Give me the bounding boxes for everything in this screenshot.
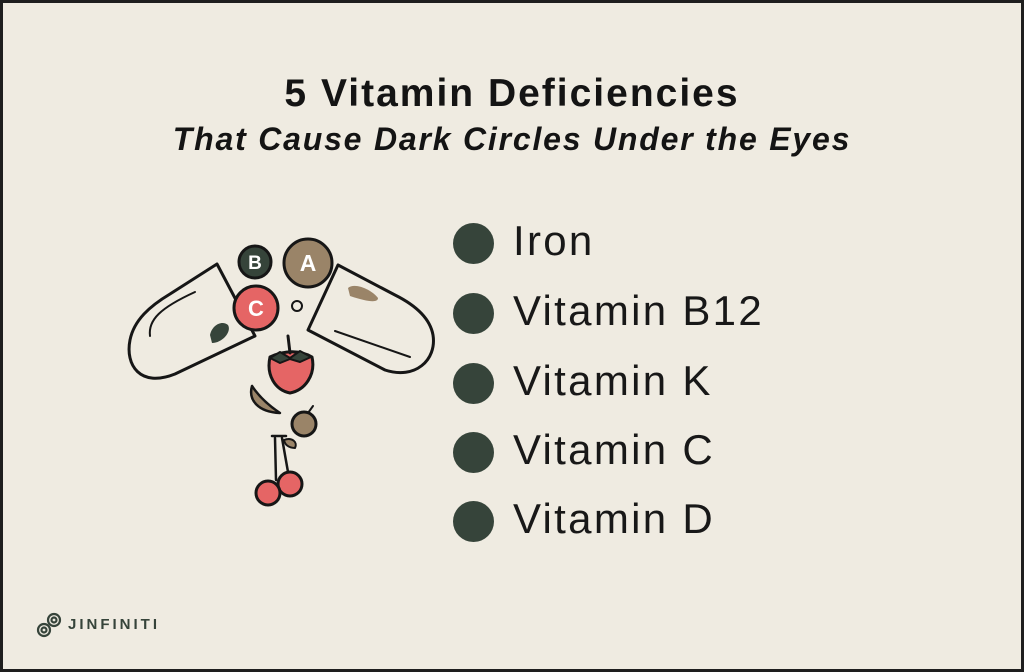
list of deficiencies bbox=[453, 217, 764, 542]
item: Vitamin K: Vitamin K bbox=[513, 357, 713, 404]
subtitle: That Cause Dark Circles Under the Eyes bbox=[173, 121, 851, 157]
icon: vitamin A bbox=[284, 239, 332, 287]
icon: vitamin A: A bbox=[300, 250, 316, 276]
icon: vitamin B bbox=[239, 246, 271, 278]
icon: vitamin B: B bbox=[248, 253, 262, 274]
icon: left capsule half bbox=[129, 264, 255, 378]
item: Iron: Iron bbox=[513, 217, 595, 264]
icon: cherries bbox=[256, 436, 302, 505]
item: Vitamin C: Vitamin C bbox=[513, 426, 715, 473]
logo bbox=[36, 612, 160, 638]
icon: right capsule half bbox=[308, 265, 433, 373]
illustration: capsule with vitamins and fruits bbox=[128, 238, 435, 506]
icon: vitamin C bbox=[234, 286, 278, 330]
icon: small round fruit bbox=[292, 406, 316, 436]
title: 5 Vitamin Deficiencies bbox=[284, 72, 740, 115]
item: Iron bbox=[453, 217, 595, 264]
icon: strawberry bbox=[269, 336, 313, 393]
icon: fruit slice bbox=[251, 386, 280, 413]
item: Vitamin D: Vitamin D bbox=[513, 495, 715, 542]
logo: JINFINITI bbox=[68, 616, 160, 633]
item: Vitamin B12: Vitamin B12 bbox=[513, 287, 764, 334]
icon: vitamin C: C bbox=[248, 296, 264, 321]
